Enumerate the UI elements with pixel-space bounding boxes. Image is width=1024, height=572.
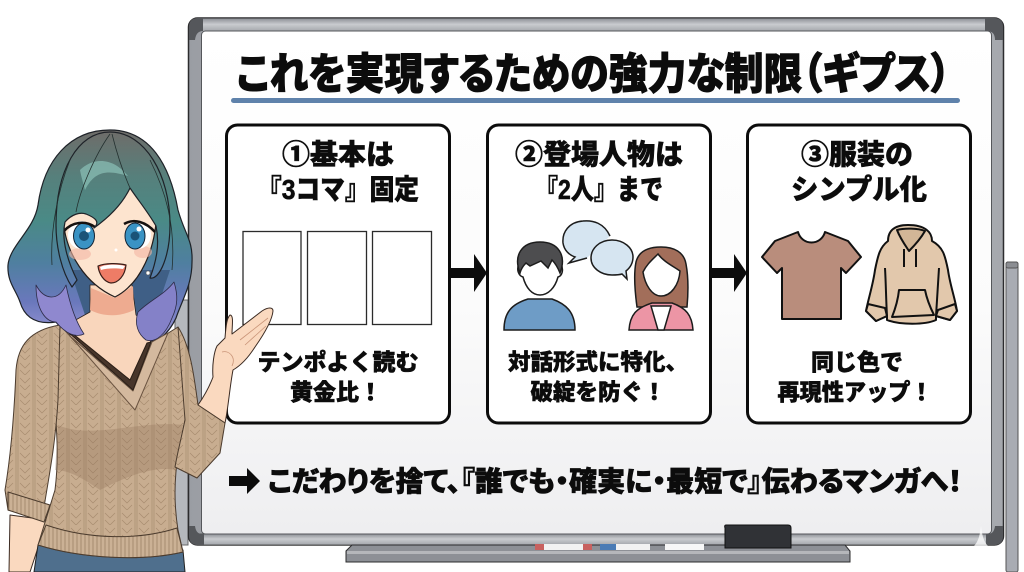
- panel 1 caption: 黄金比！: [290, 379, 382, 405]
- earring: [146, 271, 150, 275]
- jeans: [34, 545, 185, 572]
- icon: speech bubbles: [563, 221, 633, 279]
- left sleeve: [5, 325, 60, 520]
- three manga frames: [243, 232, 432, 324]
- face: [63, 170, 157, 297]
- panel 3 caption: 同じ色で: [811, 349, 903, 375]
- neckline rib: [58, 322, 168, 410]
- teeth: [100, 265, 125, 270]
- panel 3 heading: ③服装の: [801, 139, 913, 170]
- blush: [69, 246, 152, 260]
- title underline: [231, 98, 960, 103]
- panel 1 caption: テンポよく読む: [258, 349, 418, 375]
- eye left: [64, 221, 95, 249]
- neck and chest: [70, 285, 152, 390]
- panel 3 heading: シンプル化: [791, 174, 927, 205]
- hair strands: [52, 134, 173, 270]
- icon: hoodie: [866, 225, 957, 324]
- title: これを実現するための強力な制限（ギプス）: [236, 51, 950, 99]
- panel 2: two characters: [488, 125, 710, 423]
- dark hair underside: [70, 270, 170, 330]
- panel 2 caption: 破綻を防ぐ！: [530, 380, 666, 405]
- bangs: [56, 132, 170, 287]
- eye right: [124, 221, 155, 249]
- panel 1 caption: [258, 349, 418, 405]
- panel 1 heading: [257, 139, 419, 205]
- conclusion text: こだわりを捨て、『誰でも・確実に・最短で』伝わるマンガへ！: [268, 466, 962, 497]
- panel 2 heading: [515, 139, 683, 205]
- marker tray: [346, 525, 850, 562]
- left forearm: [9, 515, 47, 572]
- sparkle: [961, 526, 1001, 572]
- arrow 1: [449, 254, 487, 292]
- woman character: [5, 130, 273, 572]
- sweater body: [38, 325, 190, 558]
- panel 1: three panels: [226, 125, 450, 423]
- hair highlight: [80, 161, 128, 190]
- markers: [535, 544, 704, 550]
- back hair: [8, 130, 192, 341]
- icon: man: [504, 242, 575, 330]
- lace trim: [68, 332, 151, 390]
- sweater shadow: [55, 424, 183, 490]
- panel 3 caption: [778, 349, 932, 405]
- whiteboard: [188, 18, 1004, 545]
- panel 3 caption: 再現性アップ！: [778, 379, 932, 405]
- eraser: [725, 525, 791, 548]
- panel 1 heading: ①基本は: [282, 139, 394, 170]
- panel 2 caption: 対話形式に特化、: [508, 350, 688, 375]
- icon: woman: [629, 247, 693, 330]
- panel 2 heading: 『2人』まで: [535, 174, 663, 205]
- panel 1 heading: 『3コマ』固定: [257, 174, 419, 205]
- arrow 2: [710, 254, 747, 292]
- panel 2 heading: ②登場人物は: [515, 139, 683, 170]
- neck shadow: [90, 286, 134, 315]
- finger lines: [222, 318, 268, 366]
- left cuff: [8, 492, 50, 522]
- conclusion arrow: [229, 468, 260, 494]
- panel 3: simple clothes: [748, 125, 970, 423]
- sweater hem: [38, 525, 183, 558]
- right forearm and hand: [198, 308, 273, 423]
- nose: [114, 248, 118, 252]
- right stand leg: [1006, 262, 1018, 572]
- left stand leg: [175, 300, 188, 545]
- mouth: [98, 264, 126, 283]
- icon: t-shirt: [762, 232, 861, 319]
- right sleeve: [175, 327, 225, 478]
- panel 2 caption: [508, 350, 688, 405]
- lower hair lock left: [36, 285, 84, 336]
- panel 3 heading: [791, 139, 927, 205]
- lower hair lock right: [136, 282, 177, 341]
